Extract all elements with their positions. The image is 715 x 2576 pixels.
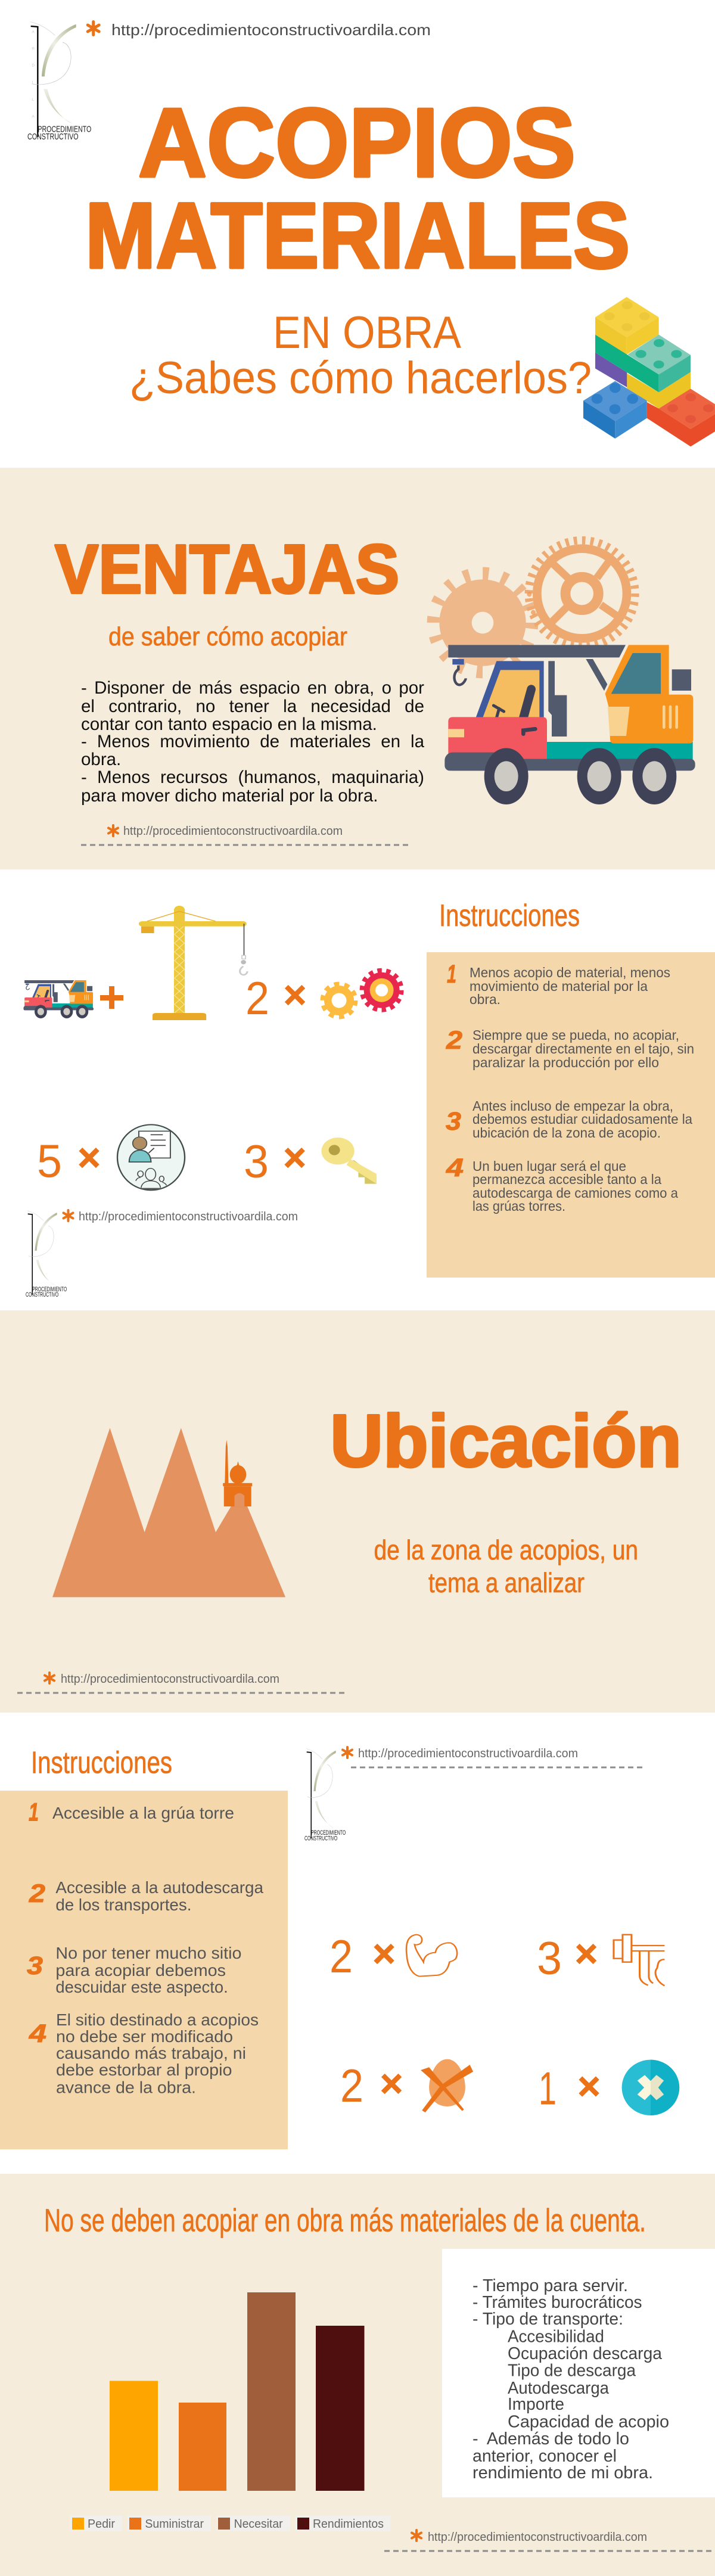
logo: CONSTRUCTIVO [27,132,79,142]
factors box [442,2249,715,2497]
icon: asterisk [88,21,99,35]
icon: crossed egg [421,2059,473,2112]
logo: PROCEDIMIENTO [38,125,91,135]
item 4: El sitio destinado a acopios [56,2011,259,2029]
website url: http://procedimientoconstructivoardila.com [111,21,431,39]
factors box: - Tipo de transporte: [472,2310,623,2329]
item 3: debemos estudiar cuidadosamente la [472,1111,692,1127]
website url: http://procedimientoconstructivoardila.com [123,825,343,838]
item 4: debe estorbar al propio [56,2061,232,2079]
item 1: 1 [447,960,456,989]
item 4: Un buen lugar será el que [472,1158,626,1174]
panel: materials needed and instructions [23,899,715,1298]
icon: asterisk [108,825,118,836]
chart legend: Necesitar [234,2518,283,2531]
multiply sign: × [284,972,306,1017]
multiply sign: × [77,1135,101,1179]
item 3: descuidar este aspecto. [55,1978,228,1996]
logo [304,1748,346,1842]
item 4: causando más trabajo, ni [56,2044,246,2062]
item 1: Accesible a la grúa torre [52,1804,234,1822]
website url: http://procedimientoconstructivoardila.com [358,1747,578,1760]
item 4: 4 [29,2019,46,2048]
item 2: descargar directamente en el tajo, sin [472,1041,694,1056]
panel: header [27,21,715,446]
title: acopios: ACOPIOS [138,88,576,197]
item 4 [446,1154,678,1214]
item 4 [29,2011,259,2096]
ubicacion background [0,1310,715,1713]
icon: teal cross circle [622,2060,679,2115]
icon: gears [434,540,635,672]
item 3: 3 [27,1952,43,1980]
website url: http://procedimientoconstructivoardila.com [79,1210,298,1223]
factors box: rendimiento de mi obra. [472,2463,653,2482]
factors box: - Además de todo lo [472,2429,629,2448]
factors box: Capacidad de acopio [508,2412,669,2431]
item 3 [446,1098,692,1141]
count: two: 2 [245,972,269,1024]
panel: ventajas [0,468,715,869]
ventajas background [0,468,715,869]
subheading: de saber cómo acopiar [108,622,347,651]
count: two: 2 [329,1930,353,1983]
small truck icon [23,980,94,1018]
heading: ubicacion: Ubicación [330,1400,682,1483]
icon: building blocks [583,297,715,446]
plus sign [100,986,123,1009]
logo: R [32,46,35,51]
icon: muscle arm [406,1935,457,1977]
subheading line 2: tema a analizar [428,1567,585,1598]
chart legend: Suministrar [145,2518,204,2531]
item 1: Menos acopio de material, menos [470,965,670,980]
item 3 [27,1944,241,1996]
count: three: 3 [537,1932,562,1984]
item 1: 1 [29,1798,39,1827]
icon: teacher [117,1124,185,1190]
item 4: avance de la obra. [56,2078,196,2096]
factors box: Autodescarga [508,2379,609,2398]
count: two: 2 [340,2059,363,2112]
factors box: Ocupación descarga [508,2344,662,2363]
bar chart [110,2292,365,2491]
text block: ventajas list: el contrario, no tener la necesidad de [81,697,424,716]
logo: I [32,80,33,85]
item 3: No por tener mucho sitio [55,1944,241,1962]
icon: crane truck [444,645,695,804]
icon: key [321,1138,377,1184]
list background [427,952,715,1278]
item 1: movimiento de material por la [470,978,648,994]
panel: cantidad de materiales [0,2174,715,2576]
multiply sign: × [283,1135,306,1179]
heading: instrucciones: Instrucciones [439,899,580,933]
item 2: Accesible a la autodescarga [55,1878,263,1897]
item 4: las grúas torres. [472,1198,565,1214]
icon: asterisk [412,2530,421,2541]
logo: CONSTRUCTIVO [26,1291,58,1298]
item 2: paralizar la producción por ello [472,1055,659,1070]
logo: A [32,30,35,34]
subtitle: question: ¿Sabes cómo hacerlos? [129,353,592,403]
item 3: Antes incluso de empezar la obra, [472,1098,673,1114]
count: three: 3 [244,1135,269,1187]
count: one: 1 [539,2062,557,2115]
count: five: 5 [37,1135,62,1187]
multiply sign: × [577,2064,601,2108]
factors box: Accesibilidad [508,2328,604,2347]
title: materiales: MATERIALES [85,184,630,288]
item 2: 2 [29,1879,45,1908]
item 2: Siempre que se pueda, no acopiar, [472,1027,679,1043]
panel: location instructions [0,1746,679,2149]
logo: L [32,98,34,102]
text block: ventajas list: contar con tanto espacio en la misma. [81,714,377,734]
item 1: obra. [470,992,500,1007]
subheading line 1: de la zona de acopios, un [374,1534,638,1565]
multiply sign: × [372,1931,396,1975]
chart legend: Rendimientos [313,2518,384,2531]
section background [0,2174,715,2576]
icon: tower crane [139,906,247,1020]
logo: PROCEDIMIENTO [311,1829,346,1837]
item 4: autodescarga de camiones como a [472,1185,678,1201]
logo: D [32,64,35,68]
factors box: - Tiempo para servir. [472,2276,628,2295]
item 2 [29,1878,263,1914]
heading: instrucciones: Instrucciones [31,1746,172,1780]
item 4: 4 [446,1154,464,1182]
text block: ventajas list: - Menos recursos (humanos, maquinaria) [81,767,424,787]
website url: http://procedimientoconstructivoardila.com [428,2531,647,2544]
logo: PROCEDIMIENTO [32,1285,67,1293]
factors box: Tipo de descarga [508,2361,636,2381]
website url: http://procedimientoconstructivoardila.com [61,1673,279,1686]
logo [26,1211,67,1298]
item 2 [446,1026,694,1070]
factors box: anterior, conocer el [472,2447,617,2466]
item 3: para acopiar debemos [55,1961,226,1980]
subtitle: en obra: EN OBRA [273,307,461,358]
item 1 [29,1798,234,1827]
item 2: de los transportes. [55,1896,191,1914]
text block: ventajas list [81,678,424,806]
multiply sign: × [380,2061,403,2105]
chart legend [70,2516,390,2531]
panel: instructions list [427,952,715,1278]
icon: asterisk [343,1747,352,1758]
item 4: no debe ser modificado [56,2027,233,2046]
text block: ventajas list: - Menos movimiento de materiales en la [81,732,424,751]
logo: A [32,114,35,119]
panel: ubicacion [0,1310,715,1713]
icon: machine [614,1935,664,1985]
text block: ventajas list: - Disponer de más espacio en obra, o por [81,678,424,698]
item 2: 2 [446,1026,462,1055]
item 4: permanezca accesible tanto a la [472,1172,661,1187]
icon: mountains and mosque [52,1428,285,1597]
heading: ventajas: VENTAJAS [55,530,399,608]
icon: asterisk [45,1673,54,1683]
chart legend: Pedir [88,2518,115,2531]
factors box: Importe [508,2395,564,2414]
text block: ventajas list: obra. [81,750,121,769]
logo: CONSTRUCTIVO [304,1835,337,1842]
factors box: - Trámites burocráticos [472,2293,642,2312]
item 3: ubicación de la zona de acopio. [472,1125,661,1141]
multiply sign: × [575,1931,598,1975]
item 1 [447,960,670,1007]
logo [27,22,91,142]
text block: ventajas list: para mover dicho material por la obra. [81,786,378,806]
list background [0,1791,288,2149]
item 3: 3 [446,1107,461,1136]
icon: gears [323,971,402,1017]
icon: asterisk [63,1210,73,1221]
